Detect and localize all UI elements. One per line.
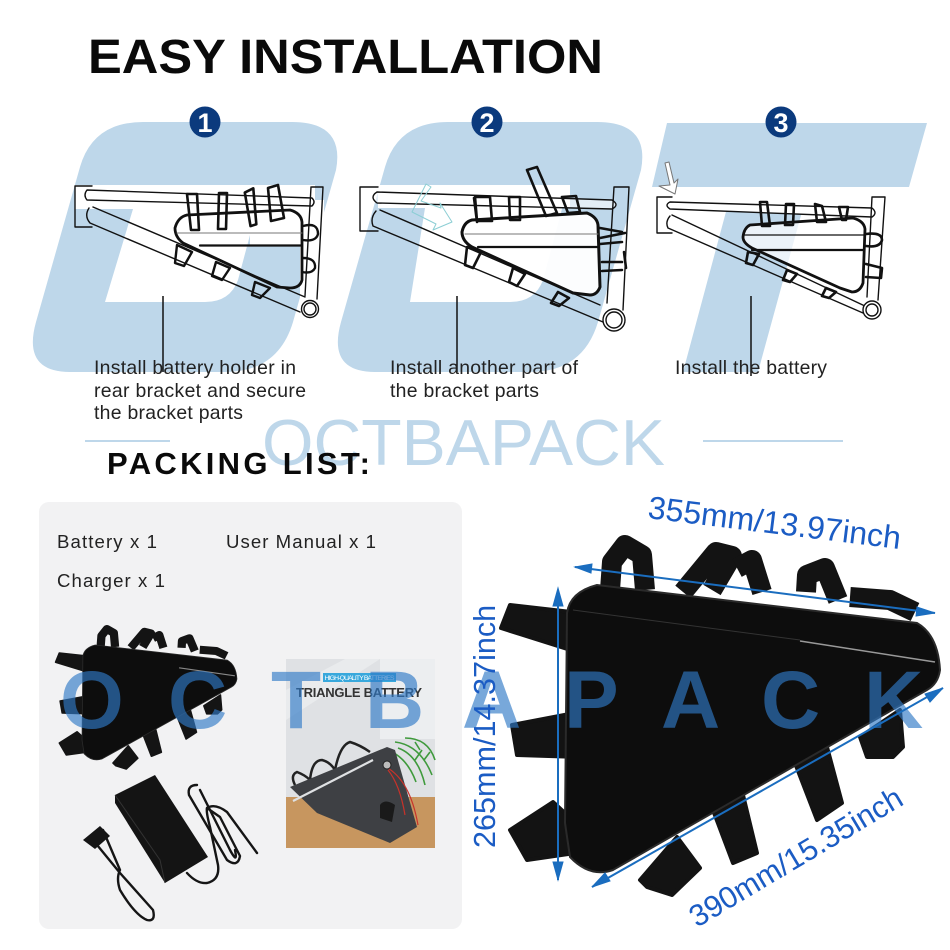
plant leaves — [392, 738, 435, 785]
packing items — [57, 531, 376, 591]
step 2 caption: the bracket parts — [390, 380, 539, 402]
red wires — [386, 767, 418, 825]
dimension arrow: left — [553, 588, 563, 880]
dimension arrow: bottom — [592, 688, 943, 887]
diagram: step 1 frame with bracket — [75, 185, 323, 318]
leader line 2 — [456, 296, 458, 372]
panel: packing list — [39, 502, 462, 929]
bag outline — [462, 213, 600, 295]
step 3 caption: Install the battery — [675, 357, 827, 379]
charger cables — [93, 785, 257, 920]
step number 1 — [190, 106, 220, 138]
dimension label: top: 355mm/13.97inch — [646, 489, 903, 556]
teal arrow — [412, 184, 452, 230]
diagram: step 3 frame with bag — [657, 162, 885, 319]
packing items: User Manual x 1 — [226, 531, 376, 552]
watermark: side rule left — [85, 440, 170, 442]
leader line 3 — [750, 296, 752, 376]
triangle battery manual — [286, 659, 435, 848]
reflective stripe — [573, 610, 800, 640]
diagram: step 2 frame with bracket — [360, 167, 629, 331]
packing list heading: PACKING LIST: — [107, 446, 370, 481]
step number 2: 2 — [479, 108, 495, 138]
charger adapter — [83, 775, 257, 920]
step 2 caption — [390, 357, 579, 402]
watermark: brand name: OCTBAPACK — [262, 406, 665, 479]
watermark: white strips behind frames — [75, 185, 902, 300]
step 1 caption — [94, 357, 306, 424]
straps — [465, 167, 626, 306]
step number 3 — [766, 106, 796, 138]
step 1 caption: Install battery holder in — [94, 357, 296, 379]
packing items: Charger x 1 — [57, 570, 165, 591]
triangle battery manual: HIGH-QUALITY BATTERIES — [324, 675, 395, 682]
step 1 caption: rear bracket and secure — [94, 380, 306, 402]
dimension arrow: top — [575, 564, 935, 616]
bag outline — [743, 218, 865, 292]
bag side tabs — [501, 605, 903, 895]
dimension label: left: 265mm/14.37inch — [468, 605, 502, 848]
straps — [746, 202, 882, 298]
manual heading: TRIANGLE BATTERY — [296, 685, 422, 700]
watermark: OCT letter shapes — [33, 122, 927, 372]
lower straps — [175, 245, 270, 298]
bag outline — [175, 210, 302, 288]
right loops — [302, 225, 318, 272]
arrow — [659, 162, 678, 194]
manual badge — [323, 673, 396, 682]
title: EASY INSTALLATION — [88, 30, 603, 84]
packing items: Battery x 1 — [57, 531, 157, 552]
step number 3: 3 — [773, 108, 789, 138]
step 2 caption: Install another part of — [390, 357, 579, 379]
watermark: spaced letters: OCTBAPACK — [60, 655, 923, 746]
upper straps — [187, 185, 284, 230]
watermark: side rule right — [703, 440, 843, 442]
step 1 caption: the bracket parts — [94, 402, 243, 424]
manual bag photo — [293, 742, 370, 785]
bag straps — [610, 545, 915, 612]
bag body — [565, 585, 940, 872]
step number 2 — [472, 106, 502, 138]
small battery bag photo — [56, 629, 237, 769]
dimension label: bottom: 390mm/15.35inch — [683, 781, 909, 934]
leader line 1 — [162, 296, 164, 372]
main battery bag photo — [501, 545, 940, 895]
step number 1: 1 — [197, 108, 213, 138]
